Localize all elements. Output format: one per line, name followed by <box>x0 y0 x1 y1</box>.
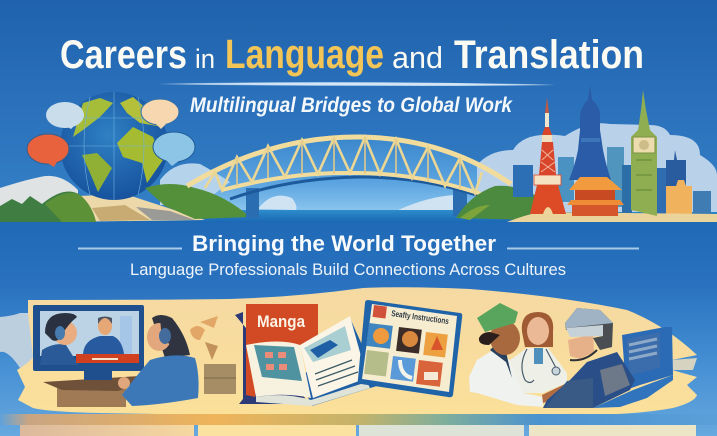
card: fourth <box>529 425 696 436</box>
heading rule right <box>507 248 639 250</box>
icon: speech bubble blue <box>153 132 195 166</box>
cloud: left <box>0 163 230 215</box>
heading: Bringing the World Together: Bringing the World Together <box>192 231 496 256</box>
icon: manga book <box>235 304 380 406</box>
icon: professionals <box>469 303 673 408</box>
hill under bridge right <box>456 186 535 220</box>
sea <box>0 210 717 222</box>
left hills <box>0 192 205 222</box>
monitor <box>33 305 144 380</box>
crate <box>204 364 236 394</box>
card: third <box>359 425 524 436</box>
panel: sand scene <box>17 287 697 416</box>
nurse <box>510 312 567 393</box>
icon: speech bubble peach <box>141 99 179 129</box>
subheading: Language Professionals Build Connections Across Cultures <box>130 260 566 279</box>
soldier with helmet <box>543 308 635 408</box>
world map <box>190 316 218 360</box>
title <box>60 31 644 77</box>
cloud: lower left <box>0 313 40 368</box>
icon: safety instructions card <box>358 300 462 397</box>
icon: speech bubble pale blue <box>46 102 84 129</box>
title: Careers <box>60 33 187 77</box>
label: Manga: Manga <box>257 312 305 331</box>
icon: Eiffel tower <box>569 85 611 180</box>
right hill near globe <box>145 184 250 219</box>
cloud: city backdrop <box>477 123 717 212</box>
woman with headset <box>118 315 199 406</box>
icon: Tokyo tower <box>530 97 566 214</box>
icon: Big Ben <box>631 90 657 216</box>
card: first <box>20 425 194 436</box>
sky behind bridge <box>187 139 520 212</box>
interface panel <box>593 327 673 408</box>
title rule <box>158 83 556 85</box>
icon: interpreting desk <box>33 305 236 407</box>
sand under city <box>507 212 717 222</box>
title: Translation <box>454 33 644 77</box>
icon: bridge <box>187 137 511 218</box>
card title: Seafty Instructions <box>391 308 450 326</box>
subtitle: Multilingual Bridges to Global Work <box>190 94 513 117</box>
title: Language <box>225 31 384 77</box>
strip <box>0 414 717 425</box>
doctor in green cap <box>469 303 567 407</box>
title: in <box>195 44 215 74</box>
city skyline buildings <box>513 147 711 216</box>
desk <box>43 376 140 407</box>
card: second <box>198 425 356 436</box>
icon: speech bubble red <box>27 134 69 167</box>
icon: globe <box>60 92 168 200</box>
title: and <box>392 40 443 75</box>
icon: temple <box>567 177 624 216</box>
heading rule left <box>78 248 182 250</box>
